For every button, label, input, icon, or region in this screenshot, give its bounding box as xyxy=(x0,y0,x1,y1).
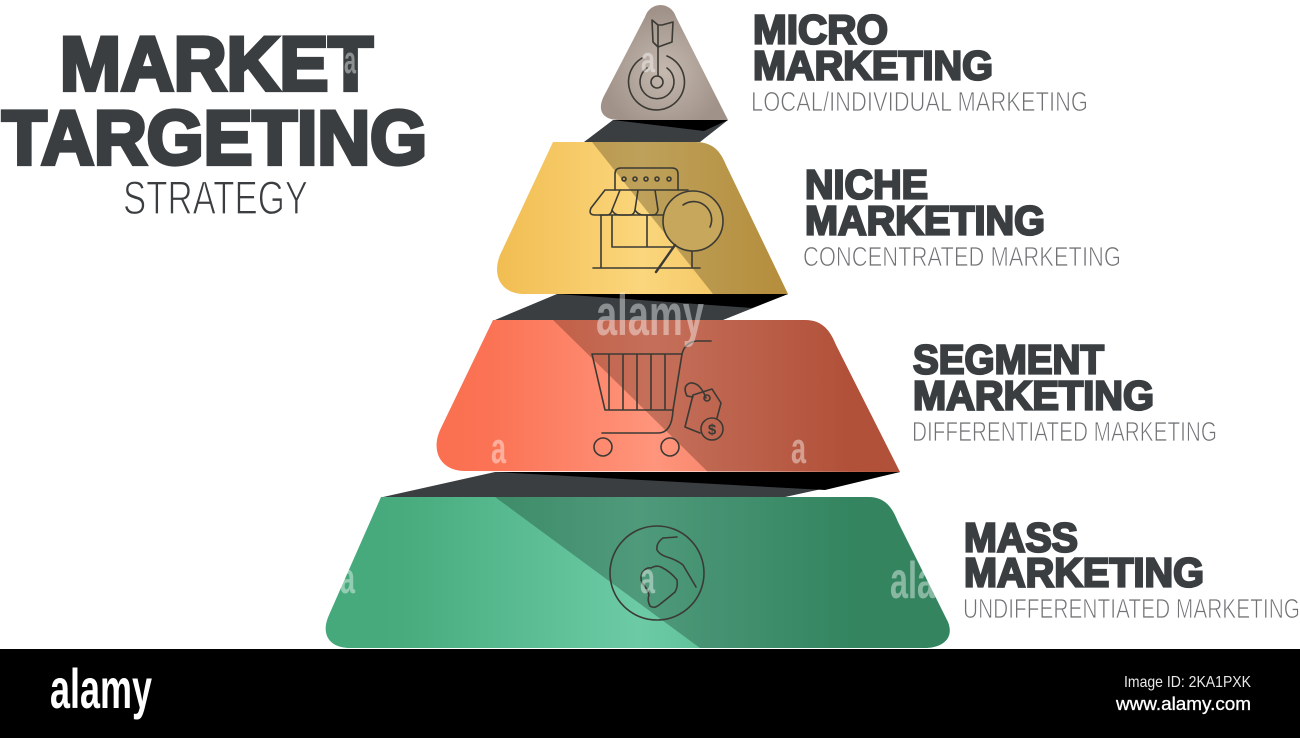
heading: marketing: MARKETING xyxy=(964,550,1204,596)
heading: micro: MICRO xyxy=(753,6,888,52)
icon: storefront with magnifier xyxy=(590,168,723,272)
title: targeting: TARGETING xyxy=(2,96,427,181)
icon: target with arrow xyxy=(628,20,684,110)
niche diagonal shade xyxy=(592,142,800,294)
title: market: MARKET xyxy=(60,22,373,107)
description: concentrated: CONCENTRATED MARKETING xyxy=(803,241,1121,272)
shadow under micro tier xyxy=(584,120,728,142)
watermark: mass right letters: ala xyxy=(890,552,936,610)
pyramid connector shadows xyxy=(383,120,900,497)
watermark: mass left letter: a xyxy=(340,554,355,603)
panel: niche tier xyxy=(497,142,800,294)
heading: niche: NICHE xyxy=(805,162,928,208)
watermark: mass center letter: a xyxy=(640,554,655,603)
micro triangle xyxy=(601,5,728,120)
mass diagonal shade xyxy=(495,497,960,648)
description: local: LOCAL/INDIVIDUAL MARKETING xyxy=(751,86,1088,117)
segment trapezoid xyxy=(437,320,900,472)
icon: shopping cart with price tag xyxy=(592,341,723,456)
watermark: segment left letter: a xyxy=(491,424,506,473)
icon: globe xyxy=(610,526,704,620)
watermark: micro letter: a xyxy=(641,39,656,80)
shadow under segment tier xyxy=(383,472,900,497)
footer logo: alamy xyxy=(50,657,152,720)
mass trapezoid xyxy=(326,497,950,648)
subtitle: strategy: STRATEGY xyxy=(123,171,308,224)
panel: mass tier xyxy=(326,497,960,648)
image id: Image ID: 2KA1PXK xyxy=(1124,674,1251,691)
icon: dollar sign: $ xyxy=(708,422,717,438)
label: mass marketing xyxy=(963,514,1300,624)
heading: marketing: MARKETING xyxy=(753,42,993,88)
title block xyxy=(2,22,427,224)
shadow under niche tier xyxy=(495,294,788,320)
heading: marketing: MARKETING xyxy=(913,372,1154,418)
heading: marketing: MARKETING xyxy=(805,198,1045,244)
heading: segment: SEGMENT xyxy=(913,336,1104,382)
watermark: segment right letter: a xyxy=(791,424,806,473)
website: www.alamy.com xyxy=(1115,694,1251,714)
panel: segment tier xyxy=(437,320,910,472)
watermark: center logo: alamy xyxy=(596,283,704,348)
label: niche marketing xyxy=(803,162,1121,272)
footer background xyxy=(0,649,1300,738)
panel: micro tier xyxy=(601,5,728,120)
watermark: title letter: a xyxy=(344,40,356,82)
segment diagonal shade xyxy=(553,320,910,472)
heading: mass: MASS xyxy=(964,514,1078,560)
label: segment marketing xyxy=(912,336,1217,447)
label: micro marketing xyxy=(751,6,1088,117)
watermarks xyxy=(340,39,936,610)
footer bar xyxy=(0,649,1300,738)
niche trapezoid xyxy=(497,142,788,294)
